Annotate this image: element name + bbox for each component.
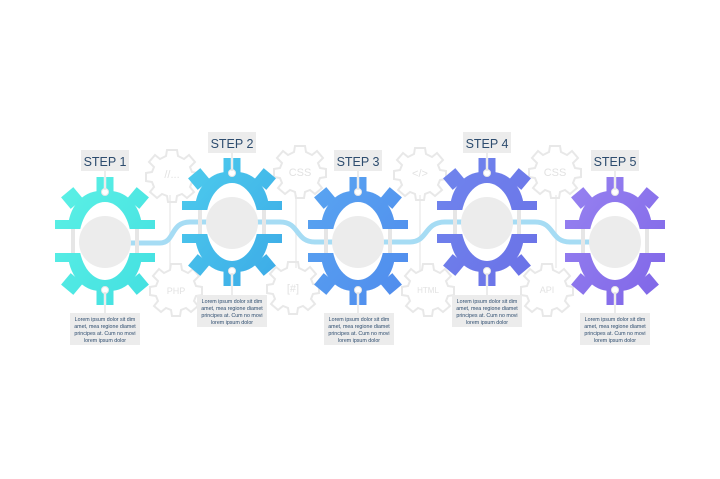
- background decorative gears: [146, 146, 581, 316]
- description boxes: amet, mea regione diamet: [74, 324, 136, 330]
- background decorative gears: PHP: [167, 286, 185, 296]
- description boxes: lorem ipsum dolor: [84, 338, 126, 344]
- description boxes: principes at. Cum no movi: [328, 331, 390, 337]
- description boxes: principes at. Cum no movi: [456, 313, 518, 319]
- step labels: STEP 1: [84, 155, 126, 169]
- background decorative gears: </>: [412, 168, 428, 180]
- description boxes: lorem ipsum dolor: [594, 338, 636, 344]
- background decorative gears: HTML: [417, 286, 439, 295]
- description boxes: principes at. Cum no movi: [74, 331, 136, 337]
- description boxes: amet, mea regione diamet: [328, 324, 390, 330]
- step labels: STEP 5: [594, 155, 636, 169]
- description boxes: amet, mea regione diamet: [201, 306, 263, 312]
- description boxes: Lorem ipsum dolor sit dim: [75, 317, 136, 323]
- description boxes: lorem ipsum dolor: [211, 320, 253, 326]
- gear step 1: [55, 177, 155, 305]
- description boxes: Lorem ipsum dolor sit dim: [585, 317, 646, 323]
- gear step 4: [437, 158, 537, 286]
- description boxes: [70, 273, 650, 345]
- background decorative gears: CSS: [544, 167, 566, 179]
- background decorative gears: //...: [164, 169, 180, 181]
- step labels: STEP 4: [466, 137, 508, 151]
- step labels: STEP 3: [337, 155, 379, 169]
- description boxes: lorem ipsum dolor: [466, 320, 508, 326]
- gear step 3: [308, 177, 408, 305]
- step labels: STEP 2: [211, 137, 253, 151]
- description boxes: amet, mea regione diamet: [584, 324, 646, 330]
- description boxes: Lorem ipsum dolor sit dim: [329, 317, 390, 323]
- description boxes: Lorem ipsum dolor sit dim: [202, 299, 263, 305]
- gear step 5: [565, 177, 665, 305]
- background decorative gears: API: [540, 285, 554, 295]
- description boxes: amet, mea regione diamet: [456, 306, 518, 312]
- description boxes: lorem ipsum dolor: [338, 338, 380, 344]
- description boxes: principes at. Cum no movi: [201, 313, 263, 319]
- description boxes: Lorem ipsum dolor sit dim: [457, 299, 518, 305]
- gear step 2: [182, 158, 282, 286]
- background decorative gears: [#]: [287, 283, 299, 295]
- background decorative gears: CSS: [289, 167, 311, 179]
- step labels: [81, 132, 639, 190]
- connector pipes: [130, 222, 590, 243]
- description boxes: principes at. Cum no movi: [584, 331, 646, 337]
